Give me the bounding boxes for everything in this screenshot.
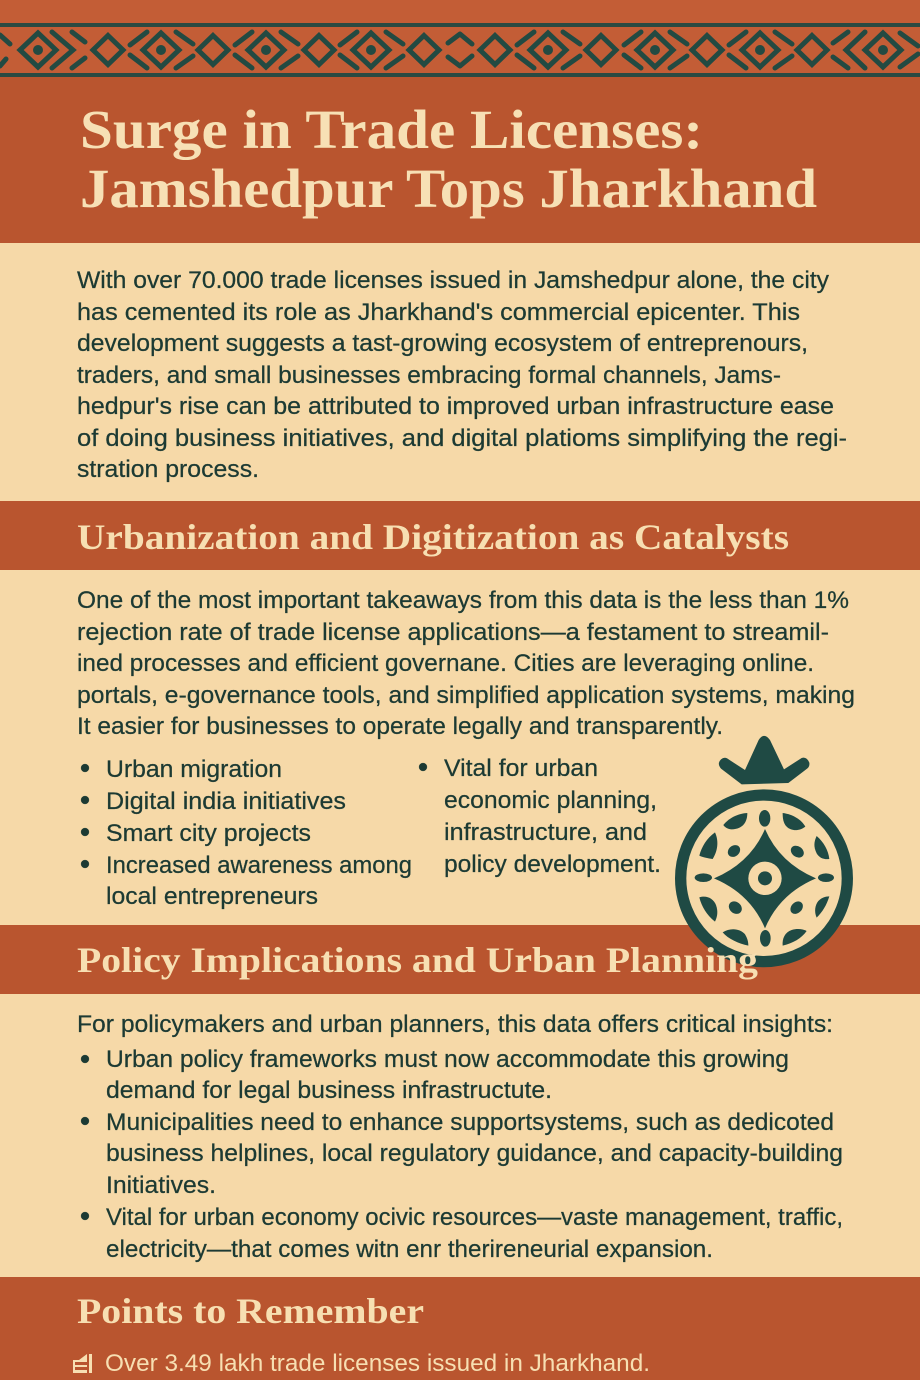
right bullet: urban planning: economic planning, bbox=[444, 787, 657, 814]
left bullet list: catalysts: local entrepreneurs bbox=[106, 883, 318, 910]
icon: ledger bbox=[73, 1354, 92, 1373]
policy text and bullets: Municipalities need to enhance supportsystems, such as dedicoted bbox=[106, 1109, 834, 1136]
policy text and bullets: Urban policy frameworks must now accommodate this growing bbox=[106, 1046, 789, 1073]
header band bbox=[0, 0, 920, 243]
urbanization paragraph bbox=[77, 587, 855, 740]
intro paragraph: development suggests a tast-growing ecosystem of entreprenours, bbox=[77, 330, 808, 357]
intro paragraph: stration process. bbox=[77, 456, 259, 483]
urbanization paragraph: portals, e-governance tools, and simplified application systems, making bbox=[77, 682, 855, 709]
urbanization paragraph: It easier for businesses to operate legally and transparently. bbox=[77, 713, 723, 740]
title bbox=[80, 99, 817, 219]
policy text and bullets: demand for legal business infrastructute. bbox=[106, 1077, 552, 1104]
section band: urbanization bbox=[0, 501, 920, 570]
urbanization paragraph: rejection rate of trade license applications—a festament to streamil- bbox=[77, 619, 829, 646]
right bullet: urban planning bbox=[419, 755, 661, 878]
section band: urbanization: Urbanization and Digitization as Catalysts bbox=[77, 517, 789, 557]
left bullet list: catalysts: Smart city projects bbox=[106, 820, 311, 847]
left bullet list: catalysts: Increased awareness among bbox=[106, 852, 412, 879]
decorative tribal border bbox=[0, 0, 920, 77]
title: Surge in Trade Licenses: bbox=[80, 99, 703, 160]
title: Jamshedpur Tops Jharkhand bbox=[80, 158, 817, 219]
intro paragraph: of doing business initiatives, and digital platioms simplifying the regi- bbox=[77, 425, 847, 452]
intro paragraph: With over 70.000 trade licenses issued in Jamshedpur alone, the city bbox=[77, 267, 829, 294]
left bullet list: catalysts bbox=[81, 756, 412, 910]
heading: points to remember: Points to Remember bbox=[77, 1291, 424, 1331]
intro paragraph: hedpur's rise can be attributed to improved urban infrastructure ease bbox=[77, 393, 834, 420]
intro paragraph: traders, and small businesses embracing formal channels, Jams- bbox=[77, 362, 781, 389]
right bullet: urban planning: infrastructure, and bbox=[444, 819, 647, 846]
key point text: Over 3.49 lakh trade licenses issued in Jharkhand. bbox=[105, 1350, 650, 1377]
policy text and bullets: business helplines, local regulatory guidance, and capacity-building bbox=[106, 1140, 843, 1167]
left bullet list: catalysts: Digital india initiatives bbox=[106, 788, 346, 815]
heading: policy implications: Policy Implications and Urban Planning bbox=[77, 940, 758, 980]
policy text and bullets: Initiatives. bbox=[106, 1172, 216, 1199]
right bullet: urban planning: policy development. bbox=[444, 851, 661, 878]
left bullet list: catalysts: Urban migration bbox=[106, 756, 282, 783]
urbanization paragraph: One of the most important takeaways from this data is the less than 1% bbox=[77, 587, 849, 614]
section band: policy background bbox=[0, 925, 920, 994]
policy text and bullets: electricity—that comes witn enr therireneurial expansion. bbox=[106, 1236, 713, 1263]
intro paragraph bbox=[77, 267, 847, 483]
policy text and bullets bbox=[77, 1011, 843, 1263]
icon: crowned medallion emblem bbox=[681, 736, 847, 962]
intro paragraph: has cemented its role as Jharkhand's commercial epicenter. This bbox=[77, 299, 800, 326]
urbanization paragraph: ined processes and efficient governane. Cities are leveraging online. bbox=[77, 650, 814, 677]
footer panel: points to remember bbox=[0, 1277, 920, 1380]
policy text and bullets: Vital for urban economy ocivic resources—vaste management, traffic, bbox=[106, 1204, 843, 1231]
right bullet: urban planning: Vital for urban bbox=[444, 755, 598, 782]
policy text and bullets: For policymakers and urban planners, this data offers critical insights: bbox=[77, 1011, 833, 1038]
